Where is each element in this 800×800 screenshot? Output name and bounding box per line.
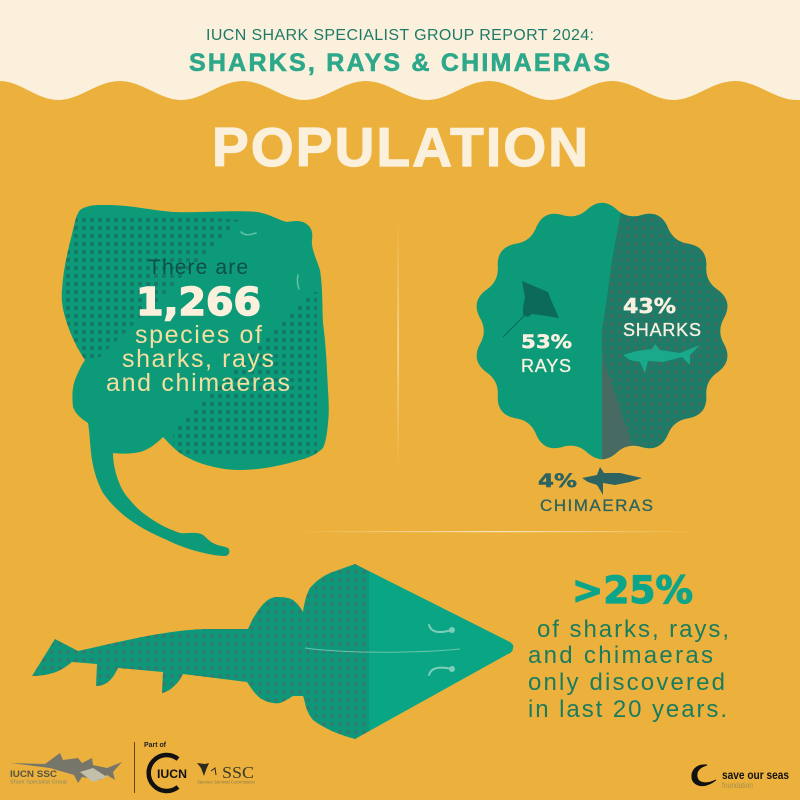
ray spiracle side (297, 275, 299, 289)
label: 43% sharks: SHARKS (623, 320, 701, 340)
logo: Save Our Seas foundation: foundation (722, 781, 753, 790)
icon: manta ray (503, 281, 559, 337)
text: discovery description: of sharks, rays, (537, 616, 729, 643)
text: species of sharks, rays and chimaeras: and chimaeras (106, 369, 290, 397)
logo: Species Survival Commission: SSC (222, 763, 254, 782)
lower eye mark (429, 666, 455, 675)
ray spiracle top (241, 232, 256, 235)
stingray silhouette (62, 205, 329, 556)
icon: chimaera (582, 467, 642, 495)
header wave band (0, 0, 800, 100)
horizontal divider (295, 531, 700, 532)
body midline (305, 648, 460, 652)
text: discovery description: only discovered (528, 669, 725, 696)
vertical divider (398, 220, 399, 470)
logo: Save Our Seas foundation: save our seas (722, 768, 789, 782)
logo divider (134, 742, 135, 793)
title: POPULATION (212, 116, 588, 178)
number: 1,266: 1,266 (136, 280, 261, 324)
label: 53% rays (521, 331, 572, 376)
logo: Save Our Seas foundation (692, 765, 789, 790)
text: discovery description: and chimaeras (528, 642, 713, 669)
label: 4% chimaeras: CHIMAERAS (540, 496, 653, 515)
logo: IUCN SSC Shark Specialist Group: IUCN SSC (10, 769, 58, 779)
text: species of sharks, rays and chimaeras: species of (135, 321, 262, 349)
stat: over 25%: >25% (572, 569, 693, 612)
label: 53% rays: 53% (521, 331, 572, 353)
label: 43% sharks: 43% (623, 294, 676, 318)
header line: subject: SHARKS, RAYS & CHIMAERAS (189, 49, 610, 77)
logo: IUCN: Part of (144, 742, 167, 749)
scalloped pie chart (476, 202, 728, 460)
text: discovery description (528, 616, 729, 723)
logo: Species Survival Commission: Species Survival Commission (197, 780, 255, 784)
icon: shark (623, 344, 700, 373)
logo: IUCN SSC Shark Specialist Group (10, 753, 122, 786)
guitarfish silhouette (25, 560, 519, 745)
logo: Species Survival Commission (197, 763, 255, 784)
logo: IUCN (144, 742, 187, 791)
logo: IUCN: IUCN (157, 767, 187, 781)
panel: species share chart (476, 202, 728, 512)
label: 53% rays: RAYS (521, 356, 571, 376)
text: species of sharks, rays and chimaeras: sharks, rays (122, 345, 274, 373)
text: species of sharks, rays and chimaeras (106, 321, 290, 397)
upper eye mark (429, 625, 455, 633)
label: 4% chimaeras (538, 470, 653, 515)
text: discovery description: in last 20 years. (528, 696, 727, 723)
logo: IUCN SSC Shark Specialist Group: Shark Specialist Group (10, 780, 67, 786)
label: 4% chimaeras: 4% (538, 470, 577, 492)
header line: report name: IUCN SHARK SPECIALIST GROUP REPORT 2024: (206, 27, 594, 44)
panel: guitarfish and discovery stat (25, 560, 729, 745)
panel: stingray species count (62, 205, 329, 556)
label: 43% sharks (623, 294, 701, 340)
text: there are: There are (148, 256, 248, 279)
